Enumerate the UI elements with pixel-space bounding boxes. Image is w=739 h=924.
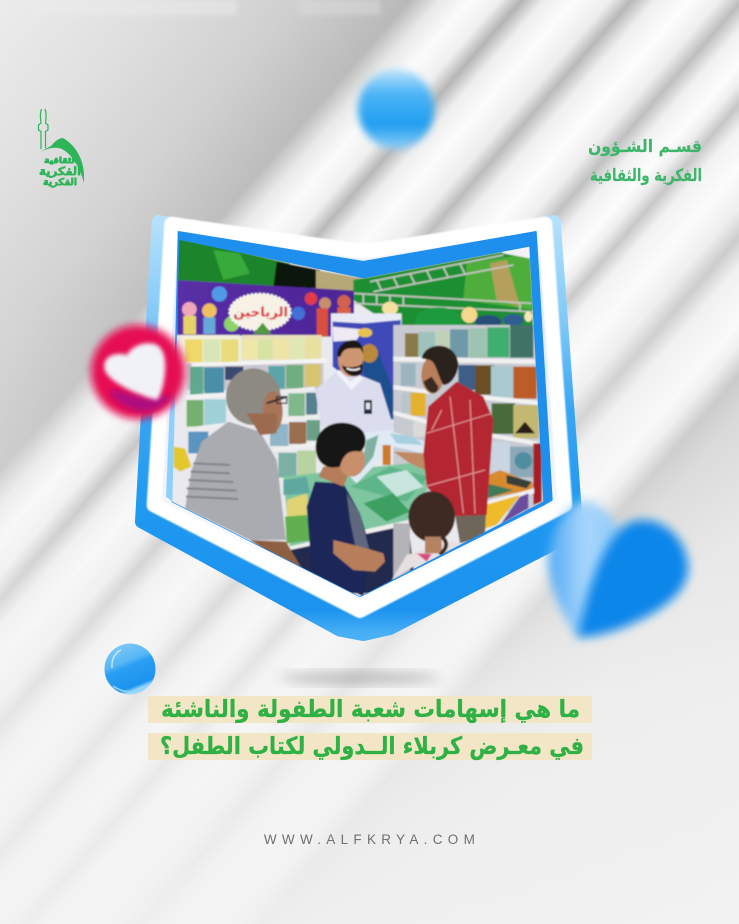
- shadow under frame: [280, 672, 440, 684]
- heading: question: في معـرض كربلاء الــدولي لكتاب الطفل؟: [160, 732, 584, 760]
- heading: question: [148, 695, 592, 760]
- icon: blue blurred ball top: [358, 69, 434, 149]
- photo: book fair stall: [163, 233, 550, 600]
- purple banner: [177, 280, 354, 337]
- frame: blue base: [142, 222, 577, 634]
- heading: question: ما هي إسهامات شعبة الطفولة والناشئة: [161, 695, 580, 723]
- logo: minaret and dome: الثقافية: [44, 156, 78, 165]
- logo: minaret and dome: الفكرية: [39, 165, 81, 178]
- frame: inner blue lip: [172, 232, 552, 597]
- boy in navy shirt: [307, 423, 385, 597]
- icon: blurred blue heart: [548, 500, 688, 638]
- starburst logo on banner: [229, 294, 291, 330]
- trees and sky: [177, 237, 290, 287]
- panel: chevron photo frame: [142, 222, 577, 634]
- table with books: [283, 430, 428, 593]
- frame: white border: [154, 224, 565, 611]
- department title: [588, 137, 702, 186]
- logo: minaret and dome: الفكرية: [43, 178, 77, 188]
- logo: minaret and dome: [38, 109, 84, 188]
- icon: blue ball: [104, 644, 156, 694]
- trusses: [353, 255, 532, 312]
- top strip artefact: [32, 0, 380, 15]
- roll-up banner: [330, 312, 403, 338]
- icon: heart badge: [91, 325, 185, 419]
- older man in gray shirt: [185, 368, 302, 568]
- department title: قسـم الشـؤون: [588, 137, 702, 157]
- department title: الفكرية والثقافية: [590, 166, 702, 186]
- man in red shirt: [393, 346, 493, 543]
- cartoon kids on banner: [182, 295, 351, 337]
- photo: book fair stall: الرياحين: [233, 306, 288, 321]
- website url: WWW.ALFKRYA.COM: [264, 832, 480, 847]
- man behind stall: [315, 340, 393, 433]
- left shelves: [173, 335, 327, 478]
- right shelves: [393, 325, 543, 528]
- girl: [392, 491, 462, 580]
